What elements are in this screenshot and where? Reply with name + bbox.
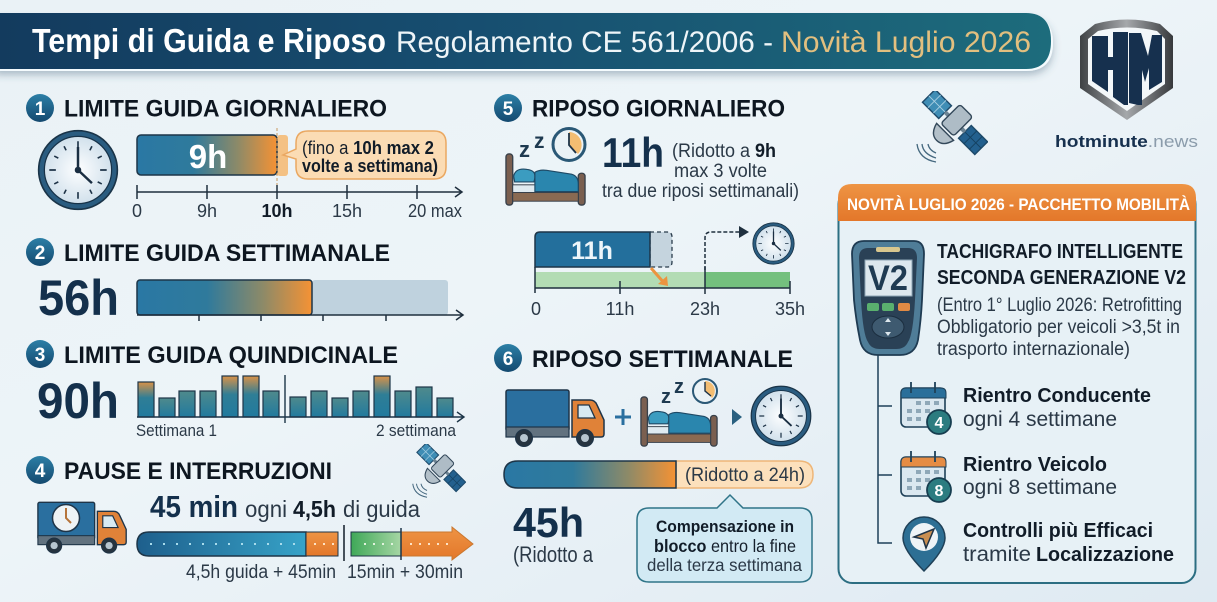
callout: up to 10h: volte a settimana) xyxy=(302,156,438,176)
arrow bar: 15 min + 30 min xyxy=(351,527,473,560)
heading 3: LIMITE GUIDA QUINDICINALE xyxy=(64,342,398,369)
tachograph note: Obbligatorio per veicoli >3,5t in xyxy=(937,317,1180,338)
value 56h: 56h xyxy=(38,270,119,326)
text: location checks: Localizzazione xyxy=(1036,544,1174,566)
bar labels xyxy=(186,562,463,583)
callout: compensation: blocco entro la fine xyxy=(654,536,796,556)
tachograph note: trasporto internazionale) xyxy=(937,339,1130,360)
tachograph title: TACHIGRAFO INTELLIGENTE xyxy=(937,241,1183,263)
section 1: daily driving limit xyxy=(26,94,462,221)
heading 6: RIPOSO SETTIMANALE xyxy=(532,346,793,373)
axis hours: 20 max xyxy=(408,201,462,221)
bar chart two weeks xyxy=(137,375,464,423)
tachograph title xyxy=(937,241,1186,289)
heading 2: LIMITE GUIDA SETTIMANALE xyxy=(64,240,390,267)
icon: truck plus bed to clock: z xyxy=(661,386,671,408)
value 45h: 45h xyxy=(513,499,584,546)
value 45h: (Ridotto a xyxy=(513,542,594,567)
icon: tachograph V2 xyxy=(852,241,924,355)
callout: compensation: della terza settimana xyxy=(647,555,802,575)
axis hours: 15h xyxy=(332,201,362,221)
text: vehicle return: ogni 8 settimane xyxy=(963,476,1117,499)
subtitle: Regolamento CE 561/2006 - xyxy=(396,26,773,59)
callout: up to 10h: (fino a 10h max 2 xyxy=(302,138,434,158)
number badge 4 xyxy=(26,456,54,484)
icon: bed with zzz and clock xyxy=(506,128,585,205)
icon: location pin xyxy=(903,517,945,571)
header banner xyxy=(0,13,1053,71)
progress bar weekly xyxy=(137,280,463,321)
icon: calendar 8: 8 xyxy=(935,483,944,500)
text: location checks: tramite xyxy=(963,543,1031,566)
icon: calendar 4: 4 xyxy=(935,415,944,432)
text: driver return xyxy=(963,385,1151,431)
section 2: weekly driving limit xyxy=(26,238,463,326)
rule text: ogni xyxy=(245,496,287,522)
bar 45h reduced to 24h xyxy=(504,461,813,488)
rule text: 45 min xyxy=(150,489,238,524)
heading 5: RIPOSO GIORNALIERO xyxy=(532,96,785,122)
icon: tachograph V2: V2 xyxy=(868,259,908,298)
bar labels: 4,5h guida + 45min xyxy=(186,562,336,583)
number badge 3 xyxy=(26,340,54,368)
number badge 1 xyxy=(26,94,54,122)
number badge 2 xyxy=(26,238,54,266)
heading 1: LIMITE GUIDA GIORNALIERO xyxy=(64,96,387,122)
number badge 5: 5 xyxy=(503,99,514,120)
rule text: di guida xyxy=(343,496,420,522)
date highlight: Novità Luglio 2026 xyxy=(781,26,1031,59)
bar 9h xyxy=(137,128,288,190)
text: driver return: Rientro Conducente xyxy=(963,385,1151,407)
panel header xyxy=(838,184,1196,221)
week labels: 2 settimana xyxy=(376,421,456,440)
icon: bed with zzz and clock: z xyxy=(534,130,544,153)
rule text xyxy=(150,489,420,524)
timeline 11h 23h 35h: 0 xyxy=(531,299,541,319)
axis hours: 10h xyxy=(261,201,293,221)
number badge 5 xyxy=(494,94,522,122)
callout: compensation: Compensazione in xyxy=(656,517,794,536)
timeline 11h 23h 35h: 23h xyxy=(690,299,720,319)
axis hours: 9h xyxy=(197,201,217,221)
timeline 11h 23h 35h xyxy=(531,223,805,319)
tachograph note: (Entro 1° Luglio 2026: Retrofitting xyxy=(937,295,1182,316)
timeline 11h 23h 35h: 11h xyxy=(606,299,634,319)
text: location checks: Controlli più Efficaci xyxy=(963,520,1153,542)
icon: truck plus bed to clock: z xyxy=(674,376,684,398)
week labels xyxy=(136,421,456,440)
number badge 6 xyxy=(494,344,522,372)
section 4: breaks xyxy=(26,439,473,583)
text: location checks xyxy=(963,520,1174,566)
section 3: fortnightly limit xyxy=(26,340,464,440)
timeline 11h 23h 35h: 35h xyxy=(775,299,805,319)
number badge 4: 4 xyxy=(35,461,46,482)
icon: calendar 8 xyxy=(901,451,951,502)
note: reduced to 9h: tra due riposi settimanali) xyxy=(602,181,799,202)
bar labels: 15min + 30min xyxy=(347,562,463,583)
icon: bed with zzz and clock: z xyxy=(519,137,530,162)
text: vehicle return: Rientro Veicolo xyxy=(963,454,1107,476)
bar: 4.5h driving + 45 min xyxy=(137,525,344,561)
note: reduced to 9h xyxy=(602,141,799,202)
callout: compensation xyxy=(637,495,812,582)
logo: HM shield xyxy=(1055,20,1198,151)
icon: truck plus bed to clock xyxy=(506,376,811,446)
tachograph note xyxy=(937,295,1182,360)
value 45h xyxy=(513,499,594,567)
axis hours: 0 xyxy=(132,201,142,221)
wordmark: hotminute .news xyxy=(1055,132,1198,151)
heading 4: PAUSE E INTERRUZIONI xyxy=(64,458,332,485)
value 90h: 90h xyxy=(37,373,119,429)
section 5: daily rest xyxy=(494,94,805,319)
callout: up to 10h xyxy=(283,131,446,179)
bar 45h reduced to 24h: (Ridotto a 24h) xyxy=(685,465,805,486)
section 6: weekly rest xyxy=(494,344,813,582)
rule text: 4,5h xyxy=(293,496,336,522)
connector lines xyxy=(878,355,892,543)
week labels: Settimana 1 xyxy=(136,421,217,440)
icon: calendar 4 xyxy=(901,382,951,434)
note: reduced to 9h: max 3 volte xyxy=(674,161,767,182)
text: vehicle return xyxy=(963,454,1117,499)
number badge 6: 6 xyxy=(503,349,513,370)
text: driver return: ogni 4 settimane xyxy=(963,408,1117,431)
icon: truck with clock xyxy=(38,502,126,553)
timeline 11h 23h 35h: 11h xyxy=(571,237,613,265)
tachograph title: SECONDA GENERAZIONE V2 xyxy=(937,267,1186,289)
icon: satellite large xyxy=(910,85,992,167)
value 11h: 11h xyxy=(602,129,664,176)
panel: new rules July 2026 xyxy=(838,184,1196,583)
icon: satellite small xyxy=(408,439,469,501)
number badge 2: 2 xyxy=(35,243,45,264)
number badge 1: 1 xyxy=(35,99,46,120)
title: Tempi di Guida e Riposo xyxy=(32,22,386,59)
number badge 3: 3 xyxy=(35,345,45,366)
note: reduced to 9h: (Ridotto a 9h xyxy=(672,141,776,162)
bar 9h: 9h xyxy=(189,138,227,175)
axis hours xyxy=(132,185,462,221)
icon: clock xyxy=(39,131,117,209)
